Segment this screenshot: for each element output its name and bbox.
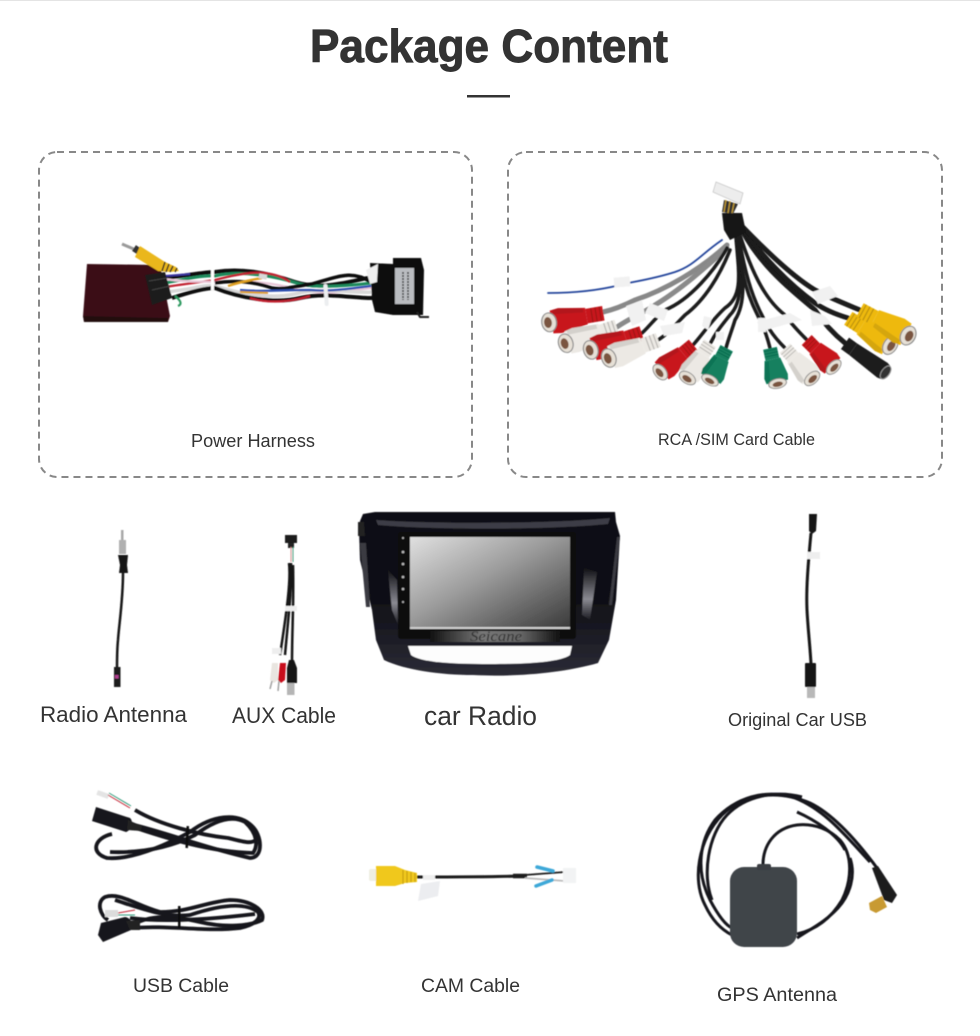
item: cam cable bbox=[369, 866, 576, 997]
label: gps antenna: GPS Antenna bbox=[717, 985, 837, 1006]
label: rca sim card cable: RCA /SIM Card Cable bbox=[658, 431, 815, 449]
item: car radio bbox=[358, 512, 620, 731]
panel border bbox=[508, 152, 942, 477]
top hairline bbox=[0, 0, 980, 1]
label: original car usb: Original Car USB bbox=[728, 710, 867, 730]
label: car radio: car Radio bbox=[424, 701, 537, 731]
photo: gps antenna bbox=[698, 794, 897, 947]
photo: car radio bbox=[358, 512, 620, 676]
label: radio antenna: Radio Antenna bbox=[40, 702, 188, 727]
title: Package Content bbox=[310, 20, 668, 72]
item: gps antenna bbox=[698, 794, 897, 1006]
item: usb cable bbox=[92, 790, 263, 997]
label: cam cable: CAM Cable bbox=[421, 976, 520, 997]
photo: cam cable bbox=[369, 866, 576, 901]
photo: aux cable bbox=[270, 535, 297, 695]
label: power harness: Power Harness bbox=[191, 431, 315, 451]
photo: radio antenna bbox=[114, 530, 128, 687]
item: aux cable bbox=[232, 535, 336, 728]
panel: power harness bbox=[39, 152, 472, 477]
item: original car usb bbox=[728, 514, 867, 730]
photo: car radio: Seicane bbox=[470, 629, 522, 645]
photo: usb cables bbox=[92, 790, 263, 942]
photo: rca cable bbox=[540, 182, 921, 391]
label: aux cable: AUX Cable bbox=[232, 703, 336, 728]
panel: rca sim card cable bbox=[508, 152, 942, 477]
title underline bbox=[467, 95, 510, 98]
label: usb cable: USB Cable bbox=[133, 976, 229, 997]
item: radio antenna bbox=[40, 530, 188, 727]
panel border bbox=[39, 152, 472, 477]
photo: power harness bbox=[83, 244, 429, 322]
photo: original car usb bbox=[805, 514, 820, 698]
